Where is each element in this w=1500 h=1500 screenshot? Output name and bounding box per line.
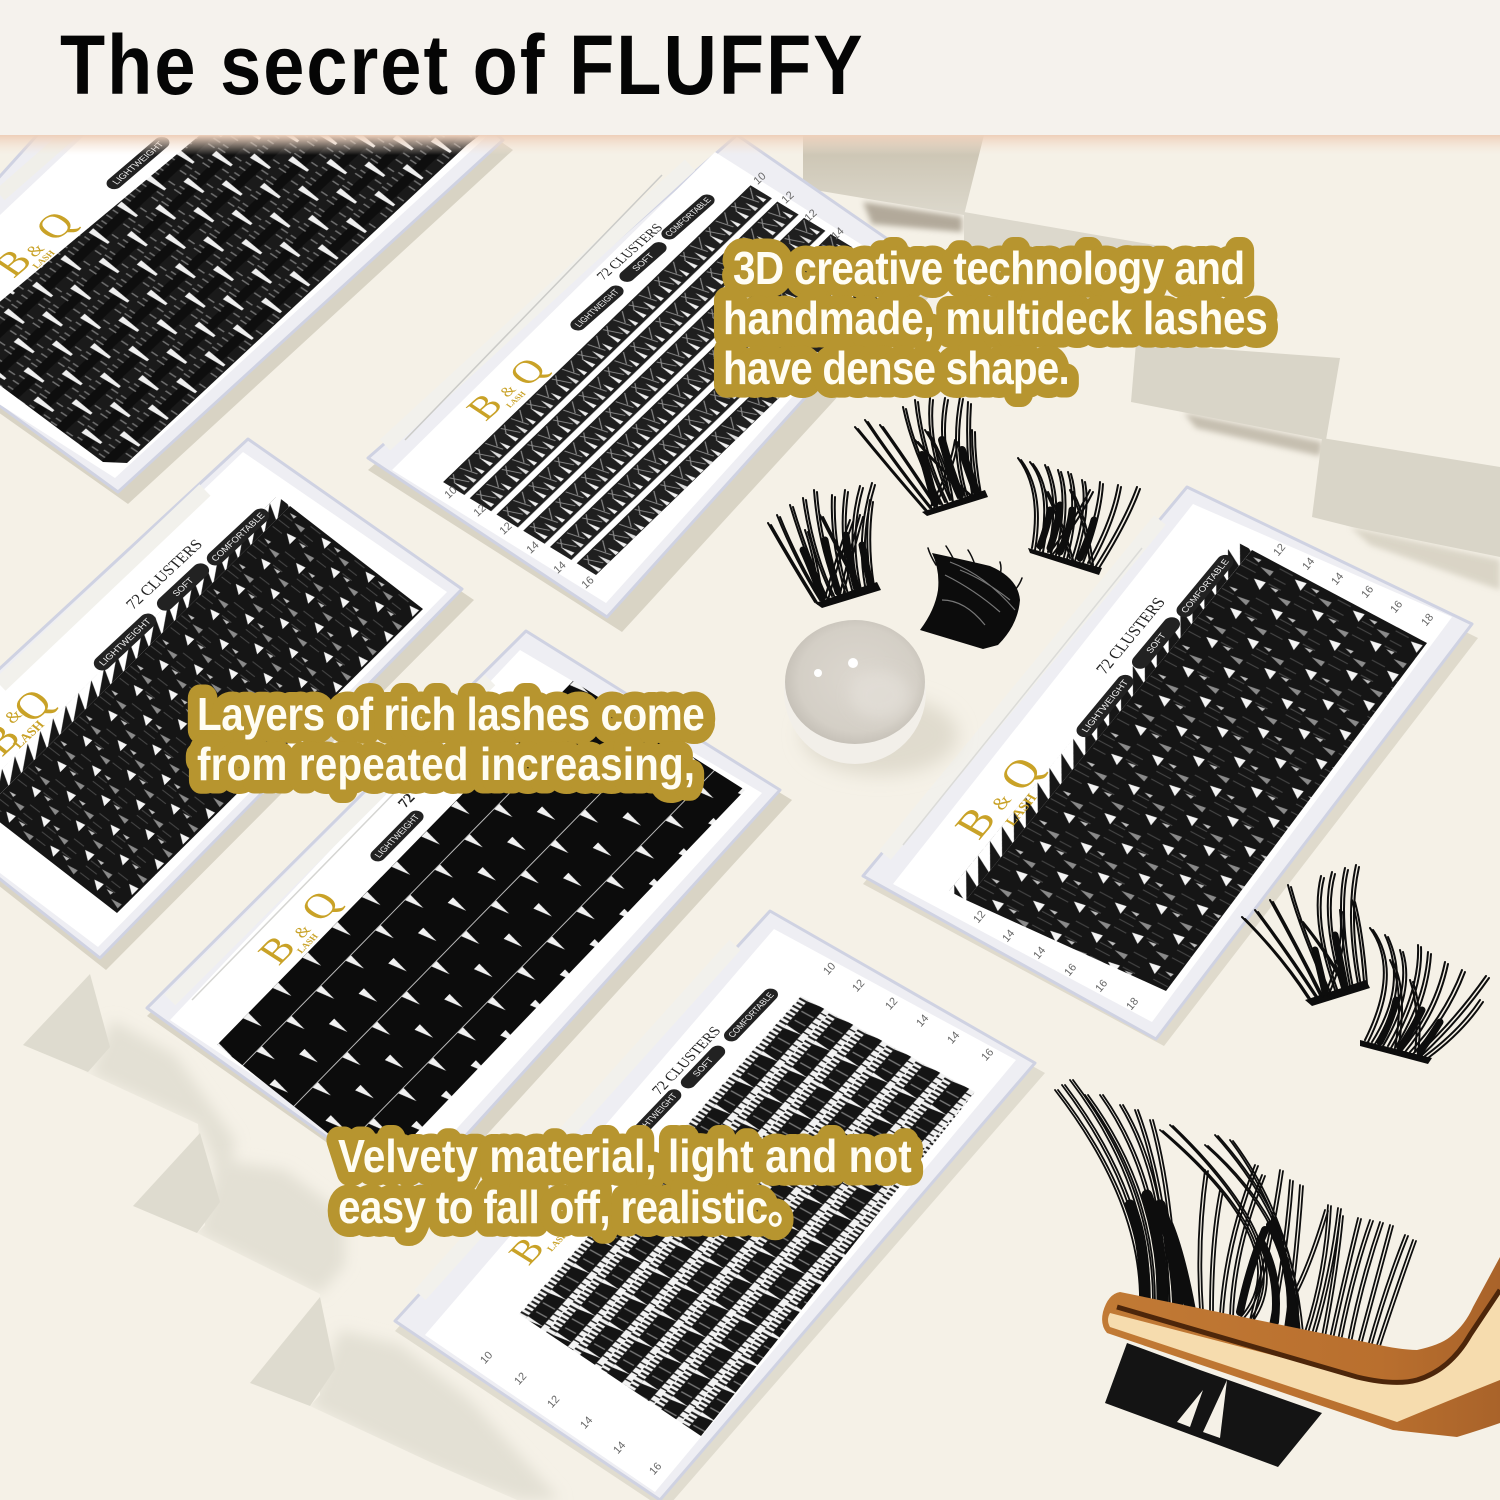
paper steps: lower left [0,974,560,1500]
length labels [478,960,996,1478]
length labels: 12 [883,995,900,1013]
brand: & [497,382,521,400]
callout: 3D creative technology: 3D creative technology and [733,244,1245,295]
badges: COMFORTABLE [663,196,713,238]
length labels: 14 [551,559,569,576]
callout: 3D creative technology [723,244,1268,395]
tray: center dark [147,631,792,1208]
brand: B [945,799,1006,846]
callout: velvety material [338,1132,912,1234]
badges: LIGHTWEIGHT [631,1091,680,1139]
brand: B [500,1231,554,1271]
length labels: 14 [611,1439,628,1457]
lash cluster: lower right 1 [1242,865,1370,1006]
badges: LIGHTWEIGHT [1080,678,1131,734]
brand [248,883,349,971]
tweezers holding lash cluster [1055,1080,1500,1467]
badge: lightweight: LIGHTWEIGHT [110,140,166,186]
tray: bottom center [395,911,1045,1500]
lash rows [966,550,1427,991]
length labels: 12 [850,977,867,995]
brand: LASH [545,1230,570,1253]
callout: layers of rich lashes: from repeated increasing, [197,740,695,791]
length labels: 14 [1000,928,1017,945]
length labels: 12 [779,189,797,206]
clusters text: 72 CLUSTERS [1092,595,1169,677]
length labels: 16 [1359,584,1376,601]
length labels: 12 [1271,542,1288,559]
callout: 3D creative technology: 3D creative technology and [733,244,1245,295]
brand: LASH [10,718,47,751]
brand: LASH [1003,792,1041,829]
badges [567,192,718,333]
crystal ball [784,620,958,775]
badges: LIGHTWEIGHT [97,616,153,668]
length labels: 18 [1124,996,1141,1013]
lash base band [1105,1343,1322,1467]
brand: Q [291,883,349,928]
length labels: 16 [1388,599,1405,616]
lash rows [519,996,975,1436]
length labels: 14 [914,1012,931,1030]
length labels: 16 [1093,978,1110,995]
callout: 3D creative technology: have dense shape. [723,344,1070,395]
callout: 3D creative technology: have dense shape. [723,344,1070,395]
brand: LASH [504,389,528,409]
length labels: 14 [1300,556,1317,573]
lash cluster: top [855,397,988,516]
length labels: 12 [545,1393,562,1411]
brand: B [458,387,512,427]
badges: COMFORTABLE [726,991,776,1039]
callout: velvety material: Velvety material, light and not [338,1132,912,1183]
lash strands above tweezers [1055,1080,1416,1349]
lash cluster: lower right 2 [1360,928,1489,1064]
length labels: 16 [1062,962,1079,979]
callout: velvety material: easy to fall off, realistic。 [338,1183,808,1234]
badge: lightweight [103,134,173,192]
callout: velvety material: Velvety material, light and not [338,1132,912,1183]
length labels: 16 [579,574,597,591]
badge: lightweight: LIGHTWEIGHT [372,812,422,859]
length labels: 14 [1329,571,1346,588]
lash spikes [0,496,290,810]
brand [0,681,62,764]
tray: top left [0,0,513,504]
brand: B [248,928,305,971]
length labels [442,170,847,591]
brand [0,204,84,284]
badges: SOFT [170,575,196,598]
badges: SOFT [630,251,657,273]
callout: layers of rich lashes: from repeated increasing, [197,740,695,791]
badges: LIGHTWEIGHT [573,287,622,329]
brand [945,749,1052,846]
brand [458,351,556,427]
callout: layers of rich lashes: Layers of rich lashes come [197,690,705,741]
tweezer highlight [1108,1290,1500,1422]
callout: layers of rich lashes: Layers of rich lashes come [197,690,705,741]
length labels [971,542,1436,1013]
lash cluster: center dense [920,546,1022,649]
length labels: 16 [979,1046,996,1064]
lash rows [0,506,423,913]
lash rows [217,681,745,1150]
brand: Q [500,351,556,393]
length labels: 14 [829,225,847,242]
length labels: 14 [578,1414,595,1432]
length labels: 10 [442,484,460,501]
badges: SOFT [1144,631,1168,655]
length labels: 14 [1031,945,1048,962]
title: The secret of FLUFFY [60,18,863,112]
brand: Q [4,681,62,731]
lash rows [0,135,480,463]
length labels: 12 [512,1370,529,1388]
lash cluster: right [1018,458,1140,575]
length labels: 12 [497,520,515,537]
lash rows [443,185,903,575]
brand: LASH [295,932,320,955]
badges [626,986,781,1143]
length labels: 14 [945,1029,962,1047]
brand: & [987,791,1017,814]
length labels: 12 [471,502,489,519]
badges [1073,552,1237,740]
callout: velvety material: easy to fall off, realistic。 [338,1183,808,1234]
badges: COMFORTABLE [209,511,267,563]
badges: COMFORTABLE [1179,557,1231,615]
header peach fade [0,135,1500,155]
callout: 3D creative technology: handmade, multideck lashes [723,294,1268,345]
header band [0,0,1500,135]
length labels: 12 [802,207,820,224]
tray: middle left [0,439,474,970]
brand: Q [25,204,84,247]
badges: SOFT [690,1055,716,1078]
length labels: 12 [971,909,988,926]
length labels: 14 [524,539,542,556]
brand: LASH [30,249,57,270]
tweezer body [1102,1257,1500,1437]
length labels: 10 [821,960,838,978]
clusters text: 72 CLUSTERS [594,222,667,283]
tray: right [863,487,1478,1046]
brand: Q [989,749,1052,798]
brand: & [290,921,315,941]
length labels: 16 [647,1460,664,1478]
brand: & [0,705,26,727]
length labels: 10 [478,1349,495,1367]
lash cluster: left [768,483,881,608]
tweezer dark edge [1117,1290,1500,1382]
badges [90,506,273,673]
length labels: 10 [751,170,769,187]
length labels: 18 [1419,612,1436,629]
callout: layers of rich lashes [197,690,705,791]
paper steps: upper right [803,135,1500,590]
lash spikes [949,541,1252,900]
clusters text: 72 [395,791,419,811]
clusters text: 72 CLUSTERS [123,537,206,613]
brand: & [21,240,49,260]
callout: 3D creative technology: handmade, multideck lashes [723,294,1268,345]
clusters text: 72 CLUSTERS [649,1024,725,1098]
tray: top center [368,135,940,632]
